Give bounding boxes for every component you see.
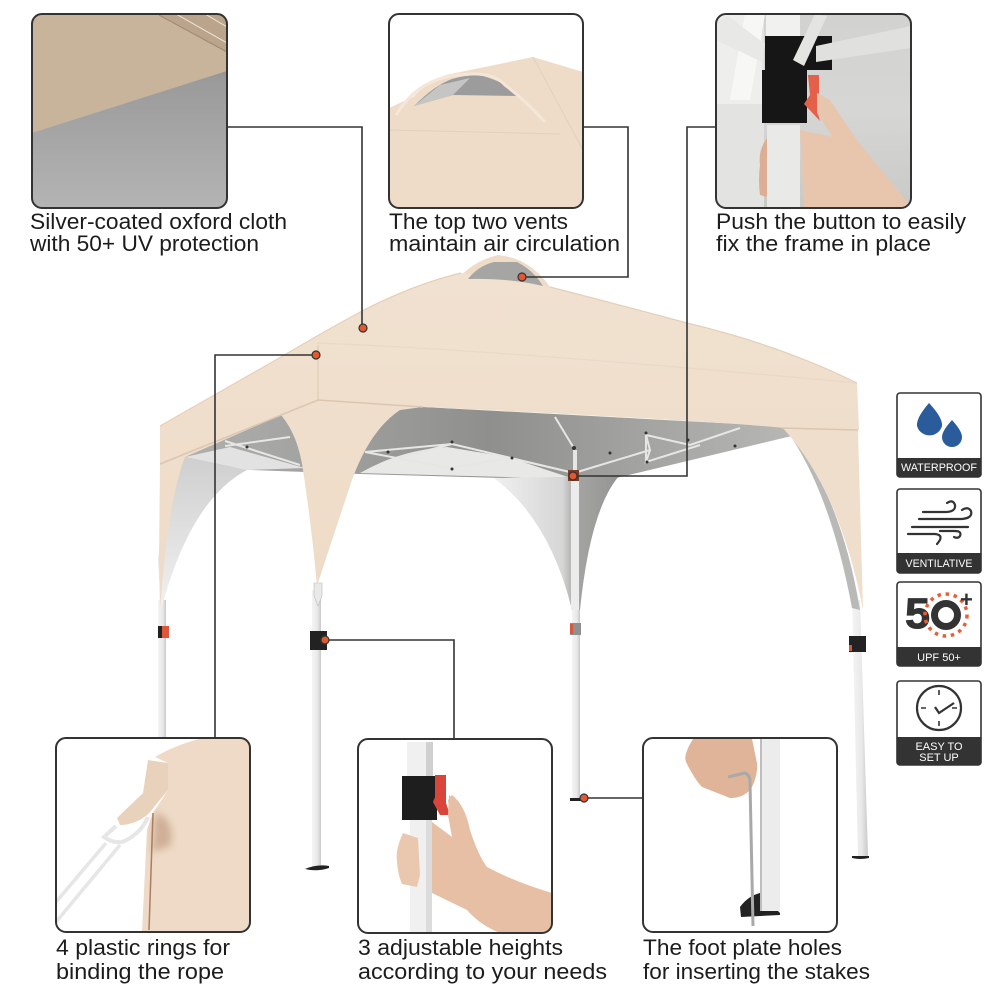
front valance shading bbox=[160, 273, 858, 464]
connector: oxford cloth panel to roof bbox=[227, 127, 367, 332]
canopy tent illustration bbox=[158, 255, 869, 870]
rear canopy lining and ceiling bbox=[180, 407, 800, 610]
panel: oxford cloth photo bbox=[32, 14, 227, 208]
caption: foot plate: The foot plate holes bbox=[643, 935, 842, 960]
foot loop bbox=[314, 583, 322, 606]
badge: easy to set up: SET UP bbox=[919, 752, 959, 764]
caption: adjustable heights: according to your needs bbox=[358, 959, 607, 984]
connector: vent panel to top vent bbox=[518, 127, 628, 281]
icon: 50 plus sun: + bbox=[960, 587, 973, 612]
caption: push button: fix the frame in place bbox=[716, 231, 931, 256]
canopy frame struts bbox=[225, 417, 740, 475]
panel: plastic rings photo bbox=[56, 738, 250, 932]
caption: plastic rings: 4 plastic rings for bbox=[56, 935, 230, 960]
panel: foot plate photo bbox=[643, 738, 837, 932]
badge: UPF 50+ bbox=[897, 582, 981, 666]
icon: 50 plus sun: 5 bbox=[905, 590, 930, 638]
badge: waterproof bbox=[897, 393, 981, 477]
caption: oxford cloth bbox=[29, 209, 287, 256]
caption: plastic rings: binding the rope bbox=[56, 959, 224, 984]
roof and valance bbox=[159, 273, 859, 610]
badge: waterproof: WATERPROOF bbox=[901, 462, 977, 474]
caption: push button bbox=[716, 209, 966, 256]
caption: adjustable heights bbox=[358, 935, 607, 984]
caption: plastic rings bbox=[56, 935, 230, 984]
connector: rings panel to corner bbox=[215, 351, 320, 738]
icon: wind bbox=[908, 501, 971, 544]
height adjustment clips bbox=[158, 470, 866, 652]
right leg of canopy bbox=[782, 427, 863, 610]
caption: adjustable heights: 3 adjustable heights bbox=[358, 935, 563, 960]
badge: ventilative bbox=[897, 489, 981, 573]
caption: vents bbox=[389, 209, 620, 256]
panel: adjustable heights photo bbox=[358, 739, 552, 933]
tent poles bbox=[158, 480, 869, 870]
badge: easy to set up bbox=[897, 681, 981, 765]
frame joints bbox=[246, 432, 736, 470]
panel: push button photo bbox=[716, 14, 911, 208]
caption: foot plate: for inserting the stakes bbox=[643, 959, 870, 984]
connector: heights panel to clip bbox=[321, 636, 454, 739]
icon: 50 plus sun bbox=[905, 587, 973, 638]
caption: push button: Push the button to easily bbox=[716, 209, 966, 234]
top vent opening bbox=[468, 262, 543, 286]
icon: clock bbox=[917, 686, 961, 730]
badge: ventilative: VENTILATIVE bbox=[906, 558, 972, 570]
caption: vents: maintain air circulation bbox=[389, 231, 620, 256]
caption: oxford cloth: with 50+ UV protection bbox=[29, 231, 259, 256]
left side lining bbox=[158, 457, 247, 610]
badge: easy to set up: EASY TO bbox=[915, 741, 963, 753]
connector: button panel to frame joint bbox=[569, 127, 716, 480]
connector: foot plate panel to foot bbox=[580, 794, 643, 802]
icon: water drops bbox=[917, 403, 962, 447]
panel: vent photo bbox=[389, 14, 583, 208]
right side lining bbox=[785, 428, 860, 610]
badge: UPF 50+: UPF 50+ bbox=[917, 652, 961, 664]
vent on roof bbox=[456, 255, 550, 287]
caption: vents: The top two vents bbox=[389, 209, 568, 234]
caption: foot plate bbox=[643, 935, 870, 984]
caption: oxford cloth: Silver-coated oxford cloth bbox=[30, 209, 287, 234]
